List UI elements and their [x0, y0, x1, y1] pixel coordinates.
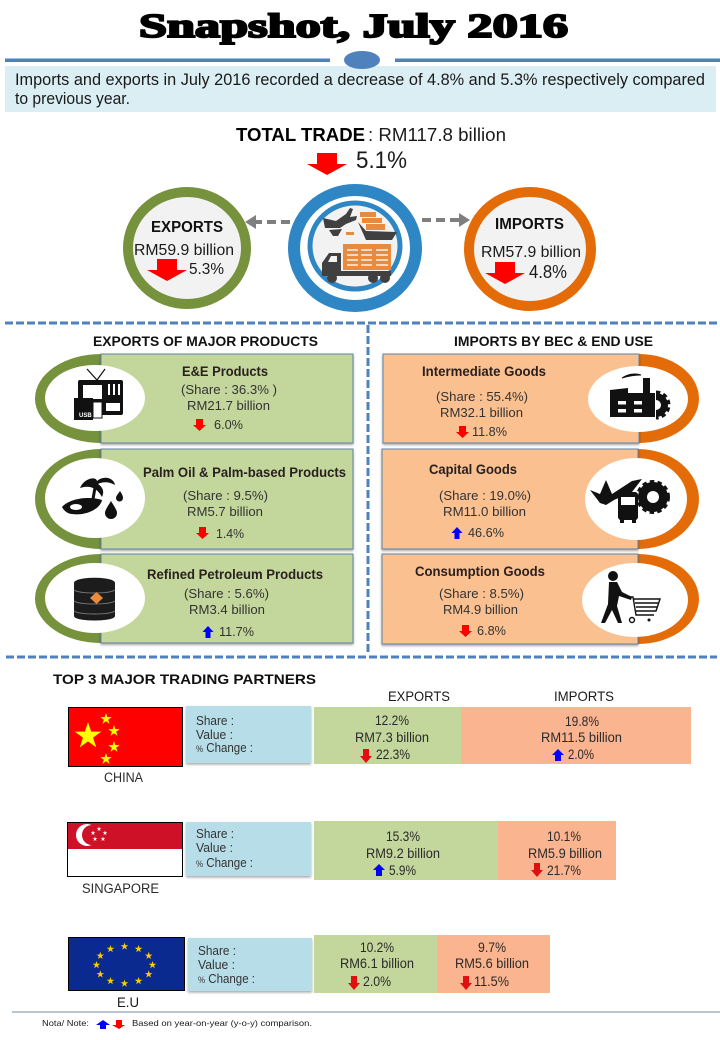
total trade change [307, 147, 407, 175]
icon: trade hub circle [294, 190, 416, 306]
exports bar: E.U: 10.2% [360, 940, 394, 955]
panel: E&E products [35, 354, 353, 443]
icon: truck [322, 244, 391, 283]
footnote: Nota/ Note: [42, 1018, 89, 1028]
text: E&E values: RM21.7 billion [187, 398, 270, 413]
summary text block [5, 66, 716, 112]
icon: Singapore flag [68, 822, 182, 876]
heading: exports of major products: EXPORTS OF MAJOR PRODUCTS [93, 334, 318, 349]
icon: palm and oil drop [62, 478, 123, 519]
imports bar: Singapore [498, 821, 616, 880]
exports bar: China: 12.2% [375, 713, 409, 728]
imports circle: 4.8% [529, 262, 567, 282]
imports circle [469, 192, 591, 306]
imports bar: China: RM11.5 billion [541, 730, 622, 745]
total trade change: 5.1% [356, 147, 407, 174]
text: E&E values: E&E Products [182, 364, 268, 379]
imports circle: RM57.9 billion [481, 244, 581, 261]
text: E&E values: (Share : 36.3% ) [181, 382, 277, 397]
label: Singapore: SINGAPORE [82, 881, 159, 896]
partner row: China [68, 706, 691, 785]
total trade heading: : RM117.8 billion [368, 125, 506, 145]
title divider [5, 51, 720, 69]
summary text block: Imports and exports in July 2016 recorded a decrease of 4.8% and 5.3% respectively compared [15, 70, 705, 89]
text: capital values: RM11.0 billion [443, 504, 526, 519]
text: petroleum values: (Share : 5.6%) [184, 586, 269, 601]
text: intermediate values: (Share : 55.4%) [436, 389, 528, 404]
exports bar: Singapore: RM9.2 billion [366, 846, 440, 861]
exports circle: RM59.9 billion [134, 242, 234, 259]
exports bar: Singapore: 15.3% [386, 829, 420, 844]
legend box: Singapore: Value : [196, 840, 233, 855]
summary text block: to previous year. [15, 89, 130, 108]
text: consumption values: 6.8% [477, 623, 506, 638]
exports circle: EXPORTS [151, 219, 223, 236]
exports bar: E.U: 2.0% [363, 974, 391, 989]
icon: China flag [68, 708, 182, 766]
panel: refined petroleum products [35, 554, 353, 643]
legend box: E.U: Share : [198, 943, 236, 958]
legend box: Singapore: % Change : [196, 855, 253, 870]
footnote: Based on year-on-year (y-o-y) comparison. [132, 1018, 312, 1028]
legend box: China: Share : [196, 713, 234, 728]
imports circle: IMPORTS [495, 216, 564, 233]
text: consumption values [415, 564, 545, 638]
text: intermediate values: RM32.1 billion [440, 405, 523, 420]
imports bar: E.U: RM5.6 billion [455, 956, 529, 971]
exports bar: China: 22.3% [376, 747, 410, 762]
label: China: CHINA [104, 770, 143, 785]
exports bar: E.U: RM6.1 billion [340, 956, 414, 971]
icon: oil barrel [74, 578, 115, 620]
imports bar: E.U: 11.5% [474, 974, 509, 989]
text: E&E values: 6.0% [214, 417, 243, 432]
text: palm oil values: RM5.7 billion [187, 504, 263, 519]
exports circle: 5.3% [189, 261, 224, 278]
exports bar: E.U [314, 935, 437, 993]
text: petroleum values: 11.7% [219, 624, 254, 639]
icon: ship [358, 212, 397, 240]
exports bar: China: RM7.3 billion [355, 730, 429, 745]
text: consumption values: (Share : 8.5%) [439, 586, 524, 601]
text: petroleum values [147, 567, 323, 639]
imports bar: E.U: 9.7% [478, 940, 506, 955]
legend box: Singapore [186, 822, 311, 876]
imports bar: E.U [437, 935, 550, 993]
text: intermediate values: 11.8% [472, 424, 507, 439]
total trade heading [236, 125, 506, 145]
column label: imports: IMPORTS [554, 688, 614, 704]
arrow: to exports [245, 215, 290, 229]
label: E.U: E.U [117, 994, 139, 1010]
heading: top 3 major trading partners: TOP 3 MAJOR TRADING PARTNERS [53, 671, 316, 687]
text: capital values: 46.6% [468, 525, 504, 540]
panel: palm oil products [35, 449, 353, 549]
text: capital values [429, 462, 531, 540]
imports bar: Singapore: RM5.9 billion [528, 846, 602, 861]
icon: factory [610, 374, 668, 417]
imports bar: Singapore: 10.1% [547, 829, 581, 844]
title: Snapshot, July 2016 [139, 8, 568, 45]
exports circle [128, 192, 246, 304]
text: capital values: (Share : 19.0%) [439, 488, 531, 503]
exports bar: Singapore: 5.9% [389, 863, 416, 878]
icon: plane [323, 208, 357, 236]
icon: shopper with cart [601, 571, 660, 623]
text: palm oil values: Palm Oil & Palm-based Products [143, 465, 346, 480]
text: palm oil values: (Share : 9.5%) [183, 488, 268, 503]
panel: capital goods [382, 449, 699, 549]
legend box: E.U: % Change : [198, 971, 255, 986]
text: intermediate values: Intermediate Goods [422, 364, 546, 379]
exports bar: Singapore [314, 821, 498, 880]
imports bar: Singapore: 21.7% [547, 863, 581, 878]
icon: EU flag [68, 938, 184, 990]
panel: consumption goods [382, 554, 699, 644]
panel: intermediate goods [383, 354, 699, 443]
arrow: to imports [422, 213, 470, 227]
column label: exports: EXPORTS [388, 688, 450, 704]
text: intermediate values [422, 364, 546, 439]
text: petroleum values: Refined Petroleum Products [147, 567, 323, 582]
text: consumption values: Consumption Goods [415, 564, 545, 579]
heading: imports by BEC and end use: IMPORTS BY BEC & END USE [454, 334, 653, 349]
legend box: Singapore: Share : [196, 826, 234, 841]
imports bar: China: 2.0% [568, 747, 594, 762]
partner row: Singapore [68, 821, 616, 896]
exports bar: China [314, 707, 461, 764]
imports bar: China: 19.8% [565, 714, 599, 729]
text: palm oil values [143, 465, 346, 541]
text: consumption values: RM4.9 billion [443, 602, 518, 617]
legend box: E.U [188, 938, 312, 991]
total trade heading: TOTAL TRADE [236, 125, 365, 145]
legend box: China [186, 706, 311, 763]
icon: plane, bus and gear [590, 479, 668, 523]
legend box: China: Value : [196, 727, 233, 742]
text: capital values: Capital Goods [429, 462, 517, 477]
partner row: E.U [68, 935, 550, 1010]
legend box: E.U: Value : [198, 957, 235, 972]
text: palm oil values: 1.4% [216, 526, 244, 541]
text: E&E values [181, 364, 277, 432]
icon: electronics [74, 369, 123, 420]
footnote [42, 1018, 312, 1029]
legend box: China: % Change : [196, 740, 253, 755]
text: petroleum values: RM3.4 billion [189, 602, 265, 617]
icon: electronics: USB [79, 413, 92, 419]
imports bar: China [461, 707, 691, 764]
